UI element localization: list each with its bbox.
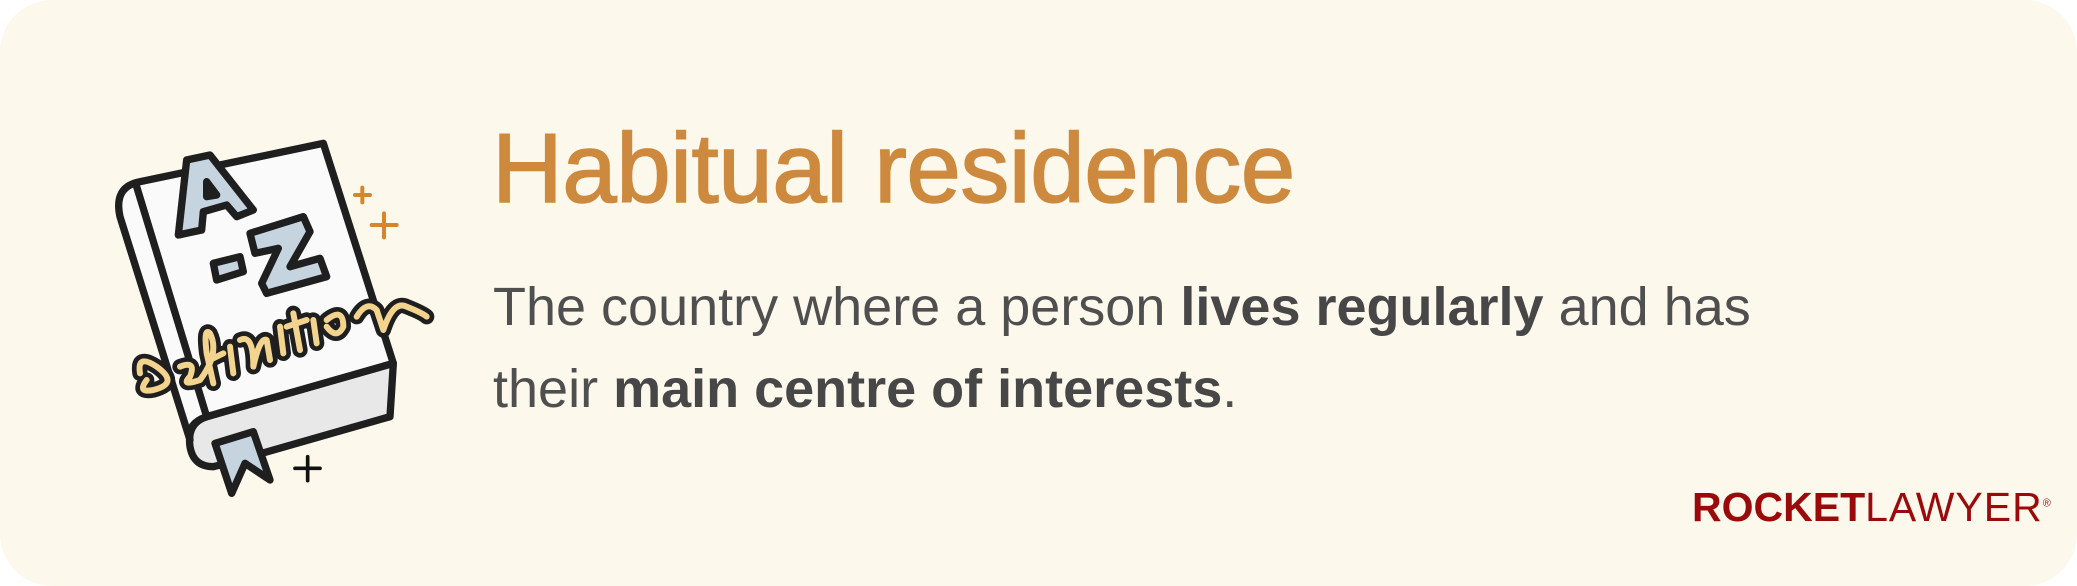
- icon: A-Z definition book: [115, 140, 434, 497]
- logo: Rocket Lawyer: ROCKETLAWYER®: [1692, 484, 2052, 530]
- title: Habitual residence: [492, 113, 1295, 223]
- text block: definition: their main centre of interests.: [493, 359, 1237, 419]
- text block: definition: The country where a person lives regularly and has: [493, 277, 1751, 337]
- text block: definition: [493, 277, 1751, 419]
